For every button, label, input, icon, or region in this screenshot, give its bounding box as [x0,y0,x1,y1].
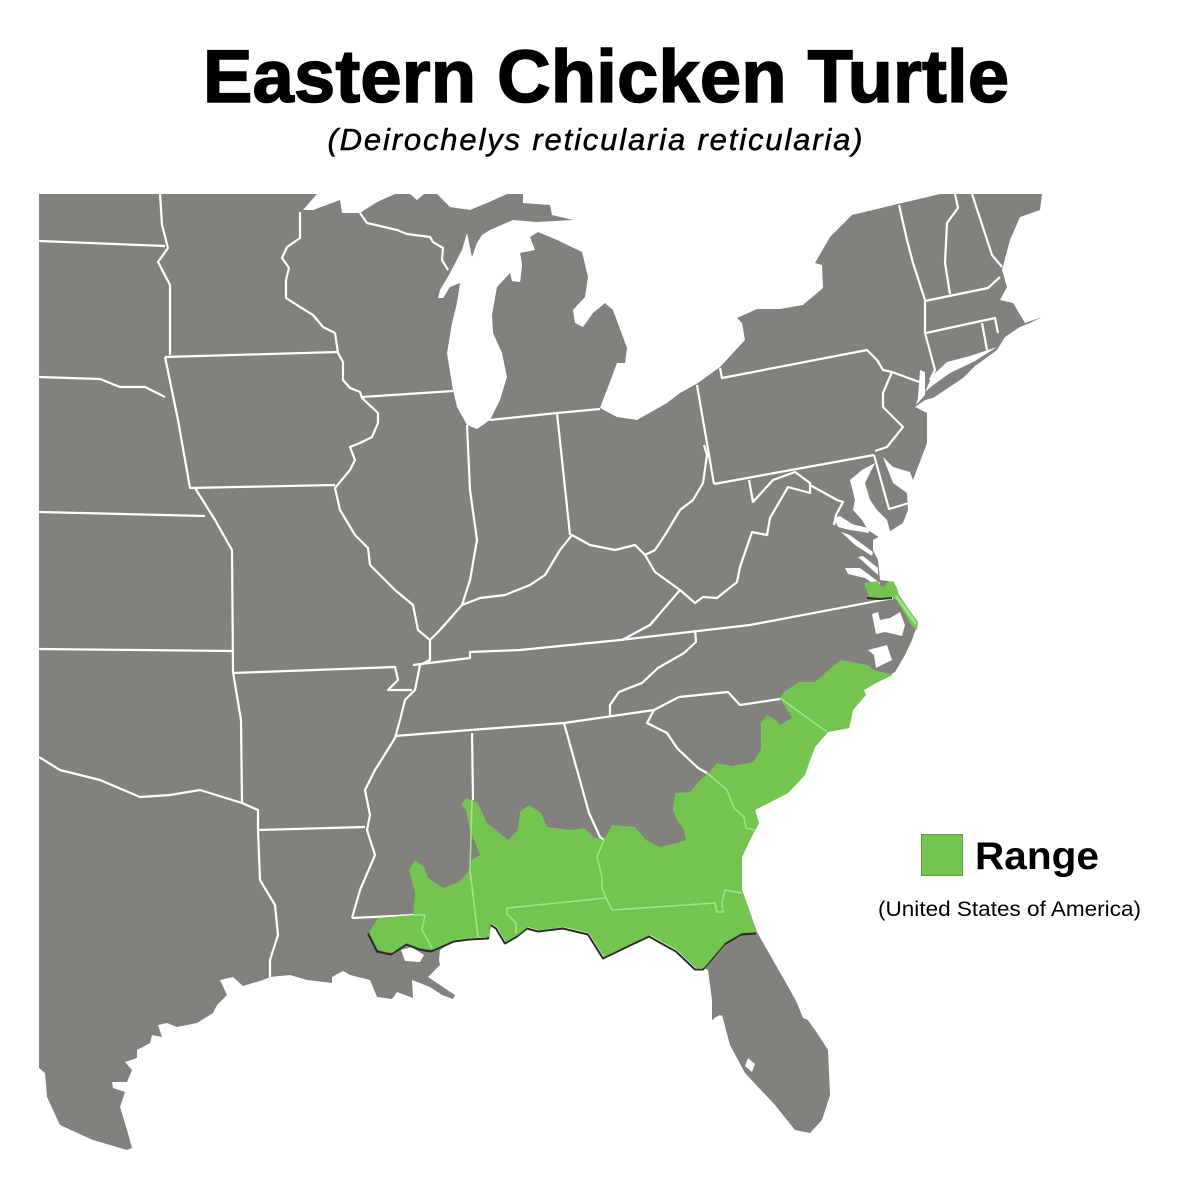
subtitle: scientific name: (Deirochelys reticularia reticularia) [328,122,862,157]
legend note: (United States of America) [878,898,1141,921]
coastal water: bays and sounds [401,253,997,1072]
Virginia range shadow [867,598,892,599]
Virginia range patch [864,581,918,630]
main southeastern range [369,660,893,968]
legend label: Range [975,835,1099,878]
state borders inside range [413,596,916,948]
map of the eastern United States [39,194,1042,1150]
title: Eastern Chicken Turtle [203,35,1009,118]
legend swatch [922,834,962,876]
legend [878,834,1141,921]
state borders [39,194,1002,977]
coastal shadow [368,924,756,970]
range area [368,581,918,970]
landmass [39,194,1042,1150]
